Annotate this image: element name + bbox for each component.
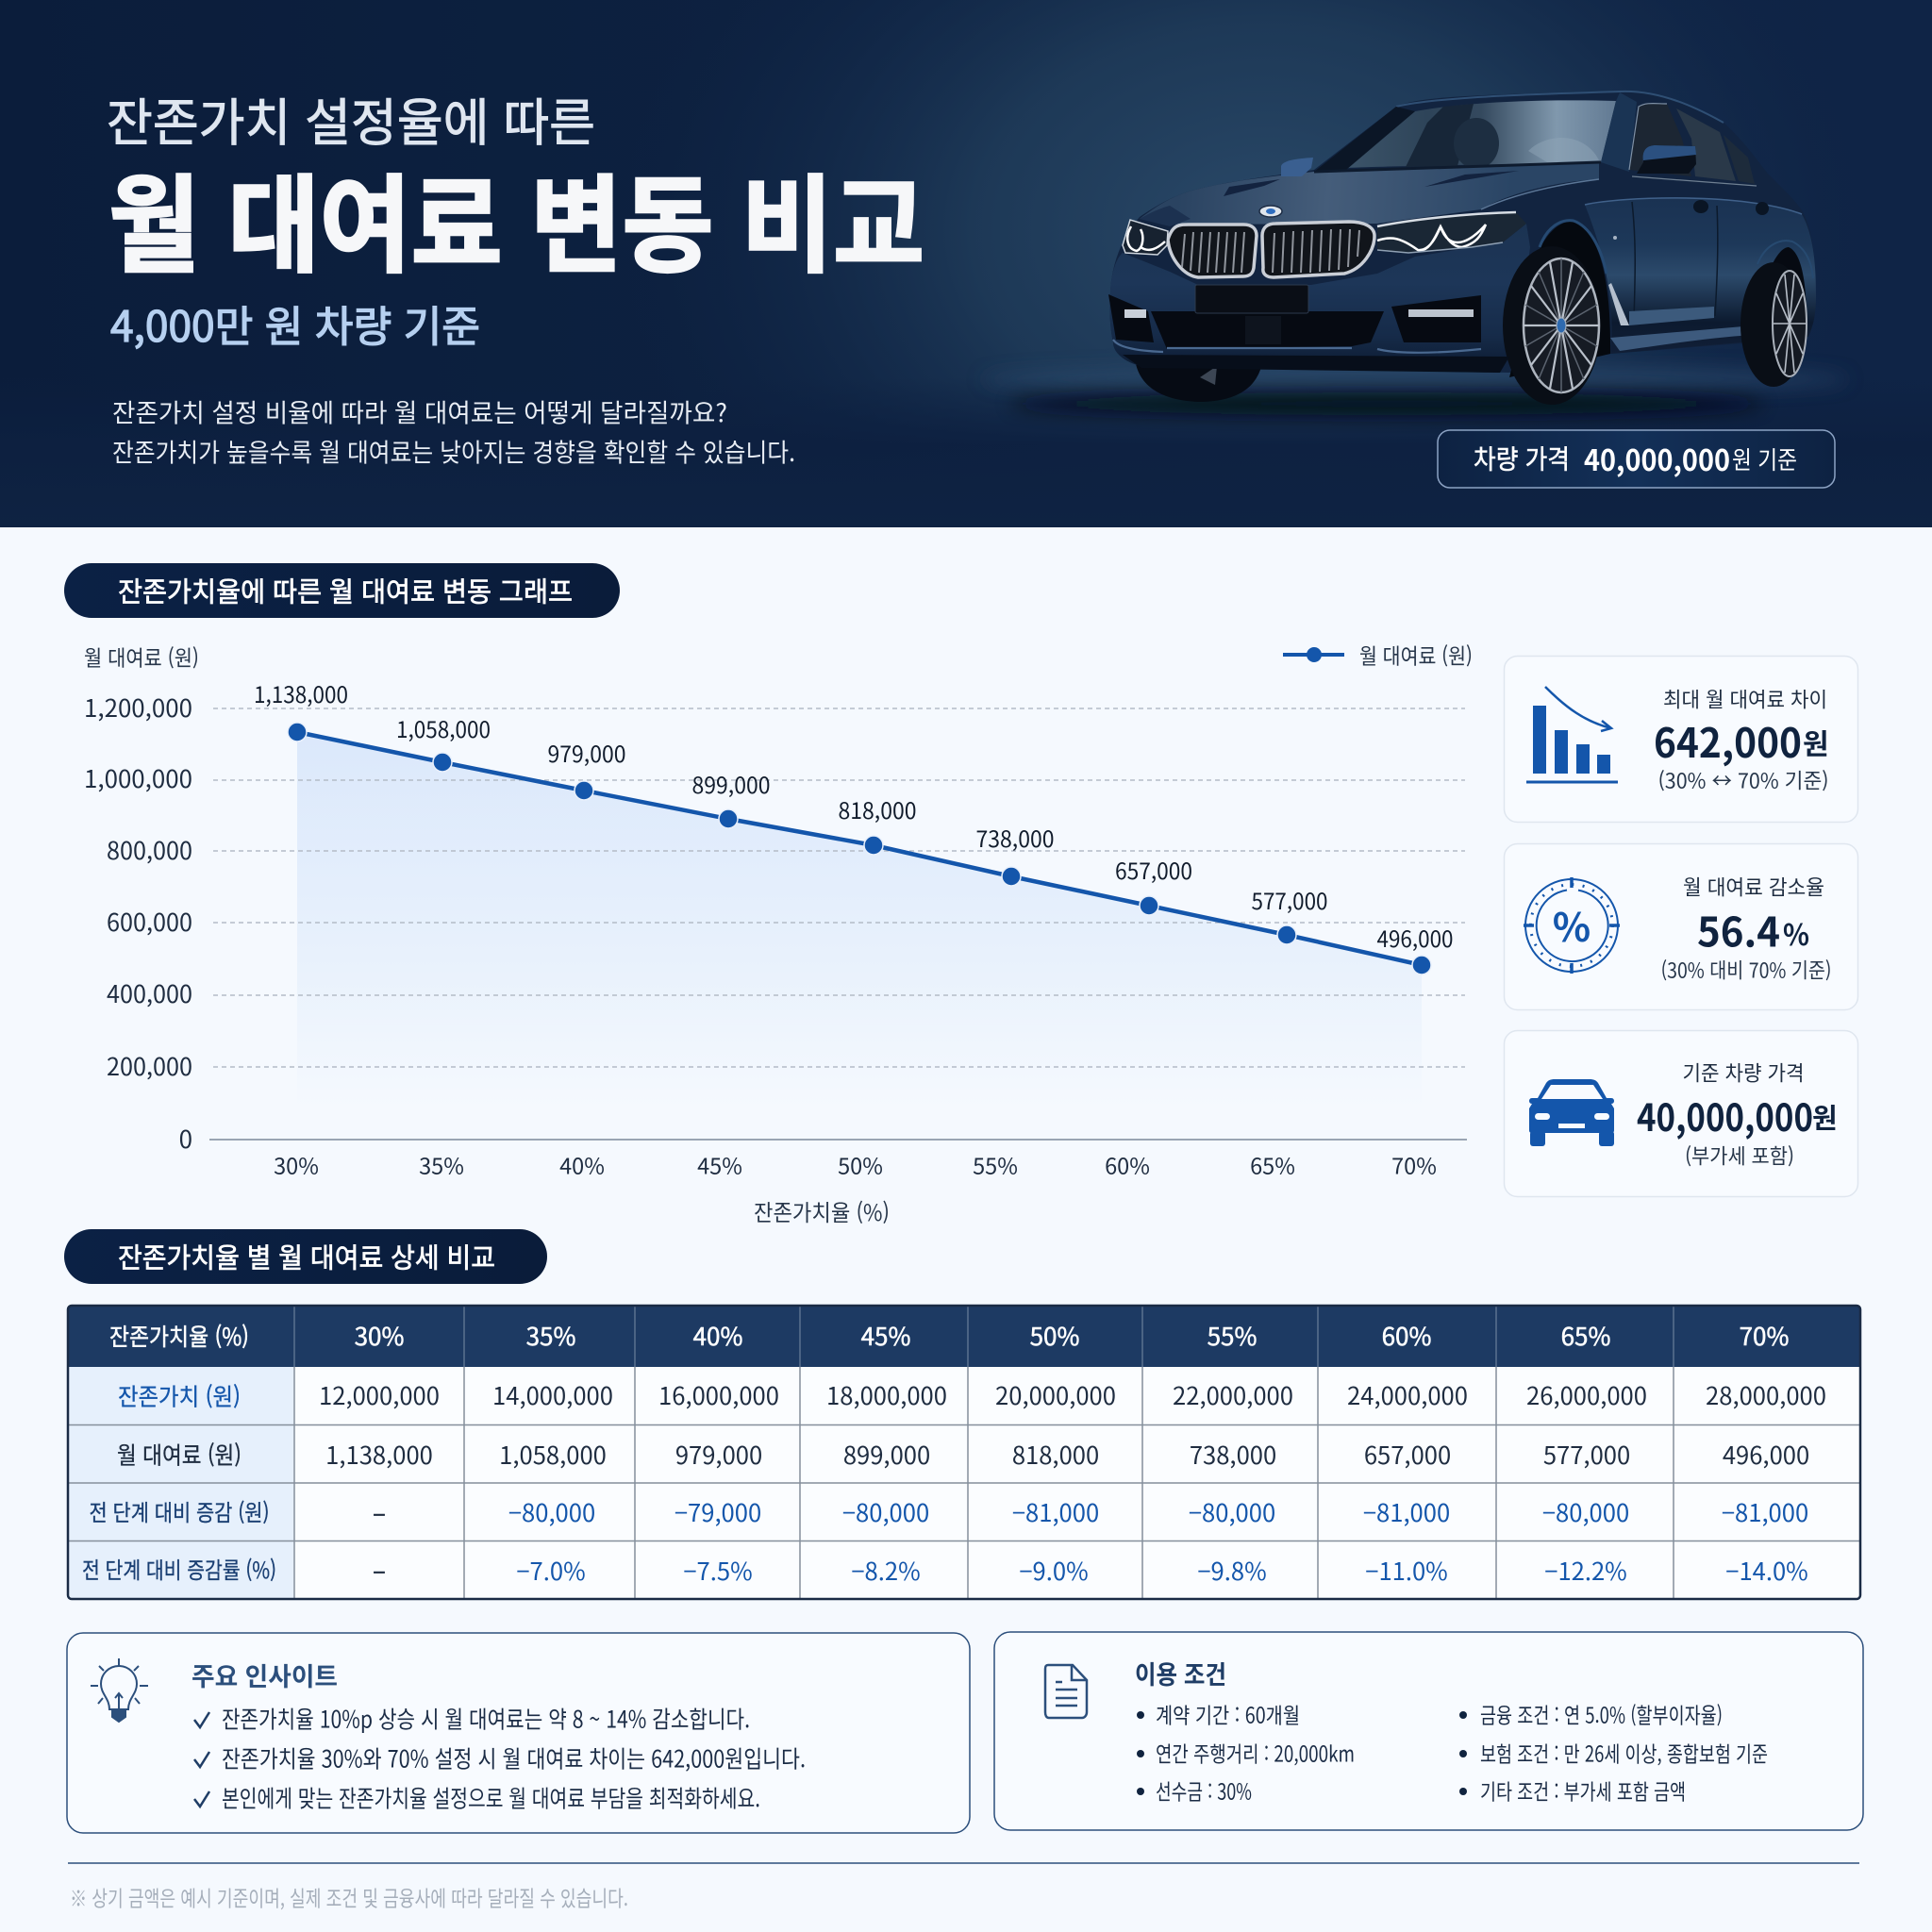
right mirror (1637, 145, 1696, 174)
footnote: ※ 상기 금액은 예시 기준이며, 실제 조건 및 금융사에 따라 달라질 수 있습니다. (70, 1881, 628, 1913)
x axis labels: 35% (419, 1149, 464, 1181)
front wheel (1503, 246, 1601, 405)
legend: 월 대여료 (원) (1359, 639, 1473, 671)
table row: residual value: 16,000,000 (658, 1377, 779, 1412)
table row: change in percent: – (373, 1552, 386, 1587)
data value labels: 818,000 (838, 792, 917, 825)
table header row: 50% (1030, 1318, 1079, 1353)
data value labels: 979,000 (547, 736, 626, 769)
hero title: first line: 잔존가치 설정율에 따른 (107, 81, 595, 156)
terms list: left: 연간 주행거리 : 20,000km (1156, 1737, 1355, 1769)
table header row: 65% (1561, 1318, 1610, 1353)
table row: change in won: −80,000 (1189, 1494, 1275, 1529)
y axis labels: 800,000 (107, 832, 192, 867)
table row: residual value: 잔존가치 (원) (118, 1379, 241, 1413)
line chart (84, 639, 1473, 1227)
stat card: base vehicle price (1504, 1030, 1858, 1196)
terms list: left: 선수금 : 30% (1156, 1774, 1252, 1807)
y axis labels: 400,000 (107, 975, 192, 1010)
table row: residual value: 24,000,000 (1347, 1377, 1468, 1412)
stat card: decrease rate (1504, 843, 1858, 1009)
terms list: left: 계약 기간 : 60개월 (1156, 1698, 1300, 1730)
insights list: 본인에게 맞는 잔존가치율 설정으로 월 대여료 부담을 최적화하세요. (222, 1781, 760, 1815)
data value labels: 577,000 (1251, 883, 1328, 916)
value: 원 (1803, 722, 1829, 763)
table row: residual value: 28,000,000 (1706, 1377, 1826, 1412)
body silhouette (1109, 92, 1816, 373)
table header row (109, 1318, 1789, 1353)
table header row: 35% (526, 1318, 575, 1353)
far front tyre (1135, 358, 1262, 402)
table row: change in won: −80,000 (508, 1494, 595, 1529)
table header row: 70% (1740, 1318, 1789, 1353)
table row: change in percent: −14.0% (1725, 1553, 1808, 1588)
table row: change in percent: −9.8% (1197, 1553, 1267, 1588)
heading: table section: 잔존가치율 별 월 대여료 상세 비교 (118, 1237, 495, 1276)
comparison table (68, 1306, 1860, 1599)
data points (288, 723, 1431, 974)
y axis labels: 1,200,000 (84, 690, 192, 724)
table header row: 30% (355, 1318, 404, 1353)
table row: monthly fee: 657,000 (1364, 1437, 1451, 1472)
badge: vehicle price: 40,000,000 (1584, 437, 1730, 479)
table row: residual value (118, 1377, 1826, 1413)
table row: residual value: 18,000,000 (826, 1377, 947, 1412)
table row: monthly fee: 818,000 (1012, 1437, 1099, 1472)
front bumper (1109, 224, 1530, 373)
x axis labels: 30% (274, 1149, 319, 1181)
table row: monthly fee: 월 대여료 (원) (117, 1438, 242, 1472)
table row: monthly fee: 577,000 (1543, 1437, 1630, 1472)
panel: key insights (67, 1633, 970, 1833)
terms list: right: 금융 조건 : 연 5.0% (할부이자율) (1480, 1698, 1723, 1730)
terms heading: 이용 조건 (1135, 1655, 1226, 1691)
licence plate (1195, 285, 1308, 313)
table header row: 45% (861, 1318, 910, 1353)
table row: change in won: −81,000 (1012, 1494, 1099, 1529)
bumper highlights (1113, 340, 1481, 353)
terms list: left (1137, 1698, 1355, 1807)
data value labels: 1,138,000 (254, 676, 348, 709)
y axis labels (84, 690, 192, 1156)
floor light and shadow (981, 366, 1849, 392)
table row: residual value: 12,000,000 (319, 1377, 440, 1412)
table row: residual value: 22,000,000 (1173, 1377, 1293, 1412)
value: 원 (1812, 1097, 1838, 1137)
insights heading: 주요 인사이트 (192, 1657, 338, 1693)
terms list: right: 보험 조건 : 만 26세 이상, 종합보험 기준 (1480, 1737, 1768, 1769)
filled area (297, 732, 1422, 1140)
hero subtitle: 4,000만 원 차량 기준 (110, 292, 480, 354)
table row: change in percent: 전 단계 대비 증감률 (%) (82, 1552, 276, 1585)
table row: change in won: −81,000 (1363, 1494, 1450, 1529)
y axis labels: 0 (179, 1121, 192, 1156)
table row: monthly fee (117, 1437, 1809, 1472)
table row: change in won: −80,000 (1542, 1494, 1629, 1529)
y axis title: 월 대여료 (원) (84, 641, 199, 673)
hero description: 잔존가치가 높을수록 월 대여료는 낮아지는 경향을 확인할 수 있습니다. (112, 432, 795, 469)
heading: graph section: 잔존가치율에 따른 월 대여료 변동 그래프 (118, 571, 573, 610)
table row: change in won: −80,000 (842, 1494, 929, 1529)
table row: change in won: 전 단계 대비 증감 (원) (89, 1494, 270, 1527)
table row: change in won: – (373, 1494, 386, 1529)
value: 642,000 (1654, 711, 1802, 770)
stat card: maximum difference (1504, 657, 1858, 823)
table header row: 60% (1382, 1318, 1431, 1353)
x axis labels (274, 1149, 1437, 1181)
insights list: 잔존가치율 30%와 70% 설정 시 월 대여료 차이는 642,000원입니다. (222, 1741, 806, 1775)
heading: table section (64, 1229, 547, 1284)
insights list (194, 1702, 806, 1815)
table row: monthly fee: 979,000 (675, 1437, 762, 1472)
y axis labels: 200,000 (107, 1048, 192, 1083)
value: % (1783, 911, 1809, 954)
x axis labels: 65% (1250, 1149, 1295, 1181)
x axis title: 잔존가치율 (%) (754, 1194, 890, 1227)
badge: vehicle price: 원 기준 (1732, 441, 1797, 476)
sill and chrome trim (1629, 307, 1714, 325)
front wheel arch (1509, 222, 1610, 377)
hero title: main line: 월 대여료 변동 비교 (108, 142, 924, 294)
value: 56.4 (1697, 901, 1780, 959)
left headlight (1123, 220, 1168, 255)
table row: change in percent (82, 1552, 1808, 1588)
note: (30% 대비 70% 기준) (1660, 955, 1832, 985)
x axis labels: 70% (1391, 1149, 1437, 1181)
illustration: dark blue sedan (981, 92, 1849, 415)
note: (부가세 포함) (1685, 1141, 1794, 1171)
icon: light bulb (91, 1658, 148, 1722)
table row: monthly fee: 738,000 (1190, 1437, 1276, 1472)
x axis labels: 60% (1105, 1149, 1150, 1181)
x axis labels: 45% (697, 1149, 742, 1181)
side panel (1585, 197, 1816, 354)
table row: change in percent: −12.2% (1544, 1553, 1627, 1588)
label: 기준 차량 가격 (1683, 1058, 1804, 1088)
right headlight (1377, 212, 1526, 253)
terms list: right: 기타 조건 : 부가세 포함 금액 (1480, 1774, 1686, 1807)
table row: residual value: 20,000,000 (995, 1377, 1116, 1412)
table row: change in won: −81,000 (1722, 1494, 1808, 1529)
value: 40,000,000 (1637, 1088, 1813, 1142)
heading: graph section (64, 563, 620, 618)
panel: hero header (0, 0, 1932, 527)
icon: percent dial: % (1553, 896, 1591, 954)
table row: change in percent: −7.0% (516, 1553, 586, 1588)
table row: monthly fee: 899,000 (843, 1437, 930, 1472)
icon: document (1045, 1665, 1087, 1718)
windshield (1346, 100, 1616, 168)
table header row: 55% (1208, 1318, 1257, 1353)
rear wheel (1740, 241, 1813, 387)
left mirror (1281, 158, 1313, 176)
data value labels (254, 676, 1453, 954)
grille (1168, 222, 1374, 277)
note: (30% ↔ 70% 기준) (1658, 765, 1828, 795)
data value labels: 1,058,000 (396, 711, 491, 744)
table row: monthly fee: 496,000 (1723, 1437, 1809, 1472)
icon: car front (1529, 1079, 1614, 1146)
table row: change in percent: −9.0% (1019, 1553, 1089, 1588)
data value labels: 899,000 (692, 767, 770, 800)
icon: percent dial (1524, 877, 1620, 974)
hood badge (1259, 206, 1282, 217)
x axis labels: 55% (973, 1149, 1018, 1181)
data value labels: 738,000 (975, 821, 1055, 854)
data line (297, 732, 1422, 965)
data value labels: 496,000 (1377, 921, 1453, 954)
badge: vehicle price (1438, 430, 1835, 488)
terms list: right (1459, 1698, 1768, 1807)
table header row: 40% (693, 1318, 742, 1353)
icon: falling bars (1526, 687, 1618, 783)
insights list: 잔존가치율 10%p 상승 시 월 대여료는 약 8 ~ 14% 감소합니다. (222, 1702, 750, 1736)
table row: change in won: −79,000 (675, 1494, 761, 1529)
front air intakes (1151, 311, 1384, 349)
table row: monthly fee: 1,058,000 (499, 1437, 607, 1472)
label: 최대 월 대여료 차이 (1663, 684, 1827, 714)
table header row: 잔존가치율 (%) (109, 1319, 249, 1353)
table row: residual value: 26,000,000 (1526, 1377, 1647, 1412)
label: 월 대여료 감소율 (1683, 872, 1824, 902)
y axis labels: 600,000 (107, 904, 192, 939)
hero description (112, 392, 795, 470)
table row: change in percent: −8.2% (851, 1553, 921, 1588)
table row: change in percent: −11.0% (1365, 1553, 1448, 1588)
x axis labels: 50% (838, 1149, 883, 1181)
table row: change in won (89, 1494, 1808, 1529)
hood (1140, 162, 1599, 225)
table row: monthly fee: 1,138,000 (325, 1437, 433, 1472)
data value labels: 657,000 (1115, 853, 1192, 886)
x axis labels: 40% (559, 1149, 605, 1181)
y axis labels: 1,000,000 (84, 760, 192, 795)
fog lights (1124, 309, 1146, 318)
legend (1283, 639, 1473, 671)
table row: residual value: 14,000,000 (492, 1377, 613, 1412)
panel: terms of use (994, 1632, 1863, 1830)
table row: change in percent: −7.5% (683, 1553, 753, 1588)
badge: vehicle price: 차량 가격 (1474, 440, 1570, 477)
hero description: 잔존가치 설정 비율에 따라 월 대여료는 어떻게 달라질까요? (112, 392, 727, 429)
door pillar (1601, 92, 1637, 172)
side windows (1629, 104, 1691, 176)
